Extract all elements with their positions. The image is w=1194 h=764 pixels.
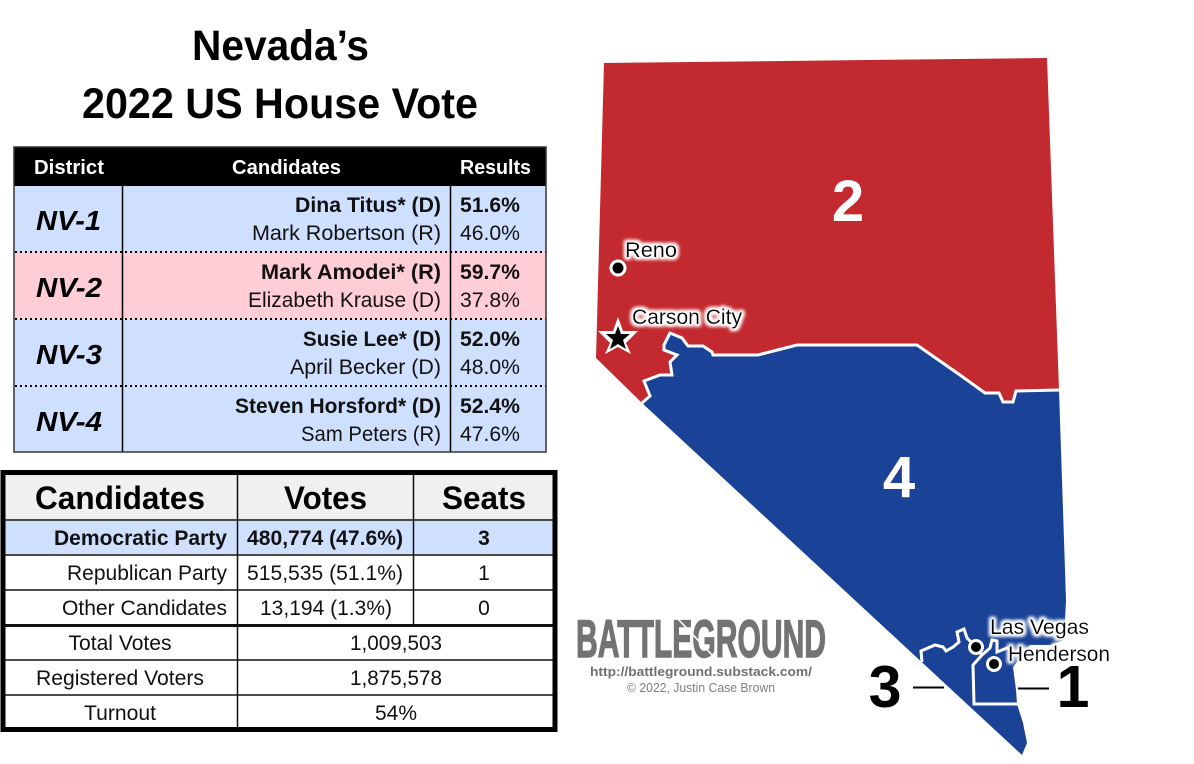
- city: Reno: Reno: [625, 239, 677, 262]
- row: NV-1: [36, 194, 520, 245]
- row: Other Candidates: 13,194 (1.3%): [260, 597, 392, 620]
- logo: Battleground: BATTLEGROUND: [576, 610, 826, 669]
- city: Las Vegas: Las Vegas: [990, 616, 1089, 639]
- row: Democratic Party: 3: [478, 527, 490, 550]
- city: Las Vegas: [970, 616, 1089, 654]
- district 2 area: [596, 58, 1059, 403]
- totals header row: Seats: [442, 480, 526, 516]
- row: Republican Party: [67, 562, 490, 585]
- title: [82, 22, 478, 128]
- row: NV-2: Mark Amodei* (R): [261, 261, 441, 284]
- row: Republican Party: Republican Party: [67, 562, 227, 585]
- label: district 3: 3: [869, 654, 901, 720]
- panel: district results table: [14, 147, 546, 452]
- label: district 1: 1: [1057, 654, 1089, 720]
- district 2/4 border: [642, 333, 1060, 403]
- table header row: Results: [460, 156, 531, 179]
- logo: Battleground: © 2022, Justin Case Brown: [627, 681, 775, 695]
- label: district 4: 4: [883, 445, 915, 510]
- logo: Battleground: [576, 610, 826, 695]
- row: NV-3: 52.0%: [460, 328, 520, 351]
- row: NV-4: NV-4: [36, 406, 102, 437]
- leader line: district 1: [1018, 688, 1049, 690]
- row: NV-3: 48.0%: [460, 356, 520, 379]
- row: NV-2: [36, 261, 520, 312]
- leader line: district 3: [913, 686, 944, 688]
- row: NV-4: 47.6%: [460, 423, 520, 446]
- city: Carson City: Carson City: [632, 306, 742, 329]
- title: Nevada’s: [192, 22, 369, 70]
- row: Democratic Party: 480,774 (47.6%): [247, 527, 403, 550]
- row: NV-1: NV-1: [36, 205, 101, 236]
- table header row: District: [34, 156, 104, 179]
- city: Carson City: [598, 306, 742, 354]
- table header row: [34, 156, 531, 179]
- row: NV-3: NV-3: [36, 339, 102, 370]
- row: Democratic Party: Democratic Party: [54, 527, 227, 550]
- title: 2022 US House Vote: [82, 80, 478, 128]
- row: NV-1: 46.0%: [460, 222, 520, 245]
- panel: statewide totals table: [3, 472, 555, 730]
- row: Registered Voters: Registered Voters: [36, 667, 204, 690]
- row: Democratic Party: [54, 527, 490, 550]
- row: NV-3: [36, 328, 520, 379]
- totals header row: Candidates: [35, 480, 205, 516]
- row: NV-2: Elizabeth Krause (D): [248, 289, 441, 312]
- totals header row: [35, 480, 526, 516]
- district 4 area: [642, 333, 1066, 755]
- row: Turnout: Turnout: [84, 702, 156, 725]
- row: NV-2: NV-2: [36, 272, 102, 303]
- logo: Battleground: http://battleground.substack.com/: [590, 664, 812, 679]
- row: NV-2: 37.8%: [460, 289, 520, 312]
- row: Turnout: [84, 702, 417, 725]
- row: NV-1: 51.6%: [460, 194, 520, 217]
- district 1/3 border: [921, 629, 1018, 704]
- city: Henderson: Henderson: [1008, 643, 1110, 666]
- row: NV-4: 52.4%: [460, 395, 520, 418]
- row: Total Votes: 1,009,503: [350, 632, 442, 655]
- city: Reno: [611, 239, 677, 275]
- row: Total Votes: Total Votes: [68, 632, 172, 655]
- row: Other Candidates: 0: [478, 597, 490, 620]
- row: Republican Party: 515,535 (51.1%): [247, 562, 403, 585]
- row: NV-1: Dina Titus* (D): [295, 194, 441, 217]
- row: Republican Party: 1: [478, 562, 490, 585]
- row: NV-3: Susie Lee* (D): [303, 328, 441, 351]
- row: NV-4: [36, 395, 520, 446]
- row: Other Candidates: [62, 597, 490, 620]
- totals header row: Votes: [284, 480, 367, 516]
- map: Nevada congressional districts: [596, 58, 1110, 755]
- row: Turnout: 54%: [375, 702, 417, 725]
- label: district 2: 2: [832, 169, 864, 234]
- row: NV-3: April Becker (D): [290, 356, 441, 379]
- row: Total Votes: [68, 632, 442, 655]
- row: NV-4: Sam Peters (R): [301, 423, 441, 446]
- row: Registered Voters: 1,875,578: [350, 667, 442, 690]
- city: Henderson: [988, 643, 1110, 670]
- row: Other Candidates: Other Candidates: [62, 597, 227, 620]
- table header row: Candidates: [232, 156, 341, 179]
- row: NV-4: Steven Horsford* (D): [235, 395, 441, 418]
- row: Registered Voters: [36, 667, 442, 690]
- row: NV-2: 59.7%: [460, 261, 520, 284]
- row: NV-1: Mark Robertson (R): [252, 222, 441, 245]
